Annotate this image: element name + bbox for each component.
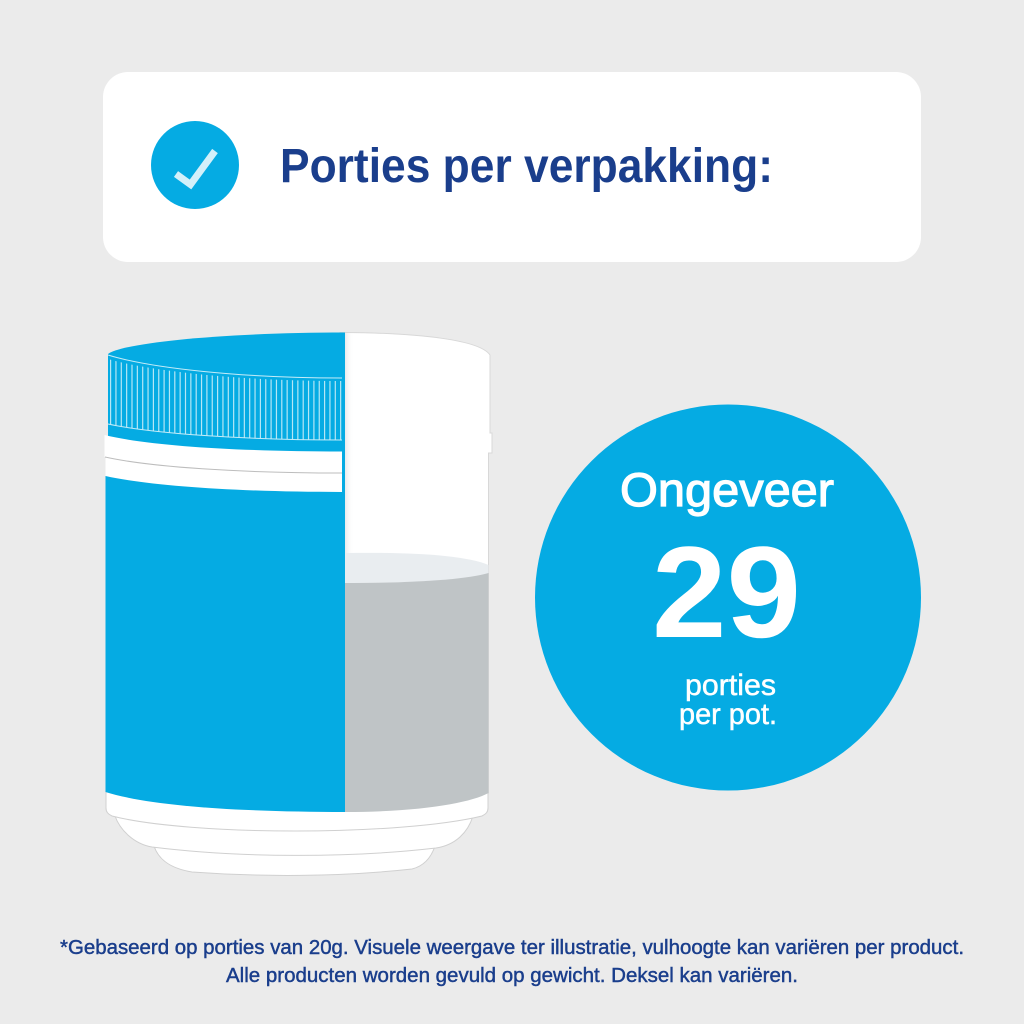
- callout number: 29: [652, 519, 801, 665]
- footnote: Alle producten worden gevuld op gewicht. Deksel kan variëren.: [226, 964, 798, 987]
- lid ribs: [110, 360, 342, 440]
- callout caption: [679, 669, 777, 731]
- footnote: [60, 936, 964, 987]
- callout circle: [535, 404, 921, 790]
- callout caption: per pot.: [679, 698, 777, 731]
- callout label: Ongeveer: [620, 463, 834, 516]
- callout caption: porties: [685, 669, 776, 702]
- jar illustration: [104, 332, 492, 875]
- heading: Porties per verpakking:: [280, 140, 773, 193]
- footnote: *Gebaseerd op porties van 20g. Visuele weergave ter illustratie, vulhoogte kan variëren per product.: [60, 936, 964, 959]
- inner shadow strip: [345, 333, 354, 553]
- header card: [103, 72, 921, 262]
- jar label: blue panel: [106, 474, 345, 812]
- jar collar: [104, 435, 342, 492]
- jar silhouette: right half: [340, 332, 492, 793]
- contents: powder fill level: [345, 553, 488, 812]
- jar base: [106, 790, 488, 875]
- icon: check mark: [151, 121, 239, 209]
- jar lid: [108, 332, 345, 480]
